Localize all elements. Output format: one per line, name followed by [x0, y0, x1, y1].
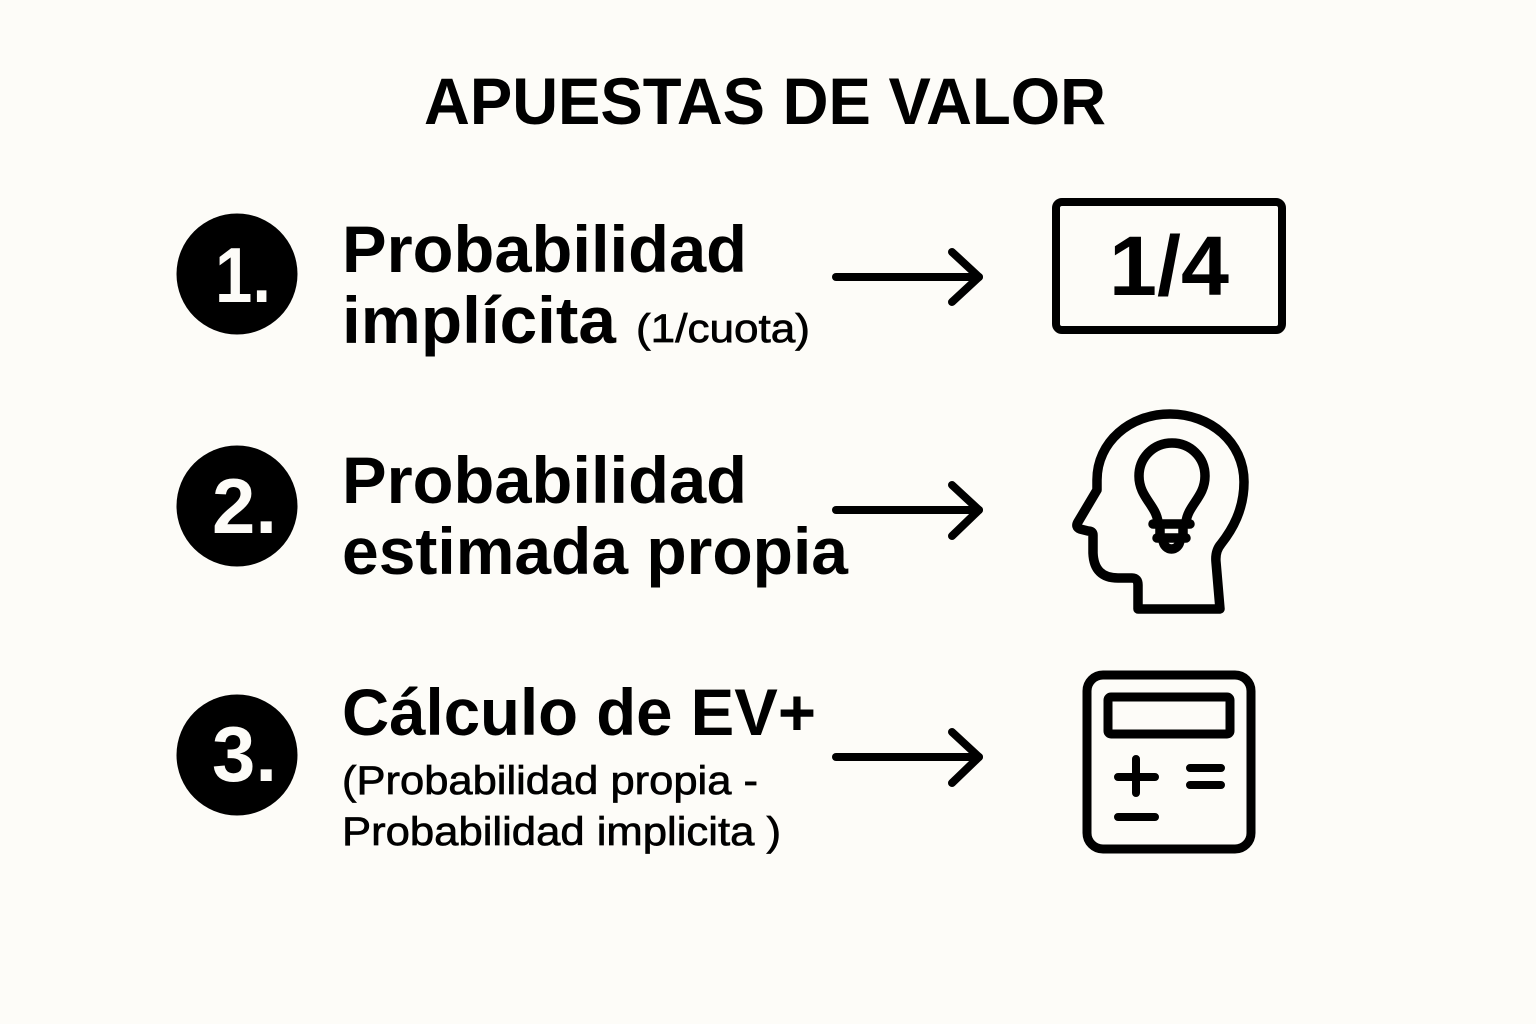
arrow 2	[836, 485, 979, 536]
number badge 2: 2.	[212, 462, 277, 550]
icon: head with light bulb	[1077, 414, 1244, 609]
number badge 1: 1.	[215, 231, 271, 319]
icon: fraction box	[1056, 202, 1282, 330]
title: APUESTAS DE VALOR	[424, 64, 1106, 138]
formula text	[342, 759, 781, 854]
light bulb	[1139, 443, 1205, 549]
number badge 3: 3.	[212, 710, 277, 798]
icon: calculator	[1087, 675, 1251, 849]
heading: probabilidad implicita	[342, 212, 810, 357]
arrow 3	[836, 732, 979, 783]
row 2: own estimated probability	[176, 414, 1244, 609]
formula text: (Probabilidad propia -	[342, 759, 758, 803]
number badge 1	[176, 214, 298, 334]
heading: probabilidad estimada propia	[342, 443, 849, 588]
heading: probabilidad implicita: (1/cuota)	[636, 307, 810, 351]
heading: probabilidad estimada propia: Probabilidad	[342, 443, 747, 517]
row 1: implied probability	[176, 202, 1282, 357]
arrow 1	[836, 252, 979, 302]
heading: probabilidad estimada propia: estimada propia	[342, 514, 849, 588]
number badge 2	[176, 446, 298, 566]
heading: probabilidad implicita: implícita	[342, 283, 617, 357]
number badge 3	[176, 694, 298, 816]
heading: probabilidad implicita: Probabilidad	[342, 212, 747, 286]
heading: calculo de EV+: Cálculo de EV+	[342, 675, 816, 749]
formula text: Probabilidad implicita )	[342, 810, 781, 854]
head outline	[1077, 414, 1244, 609]
icon: fraction box: 1/4	[1109, 219, 1229, 313]
row 3: EV+ calculation	[176, 675, 1251, 854]
